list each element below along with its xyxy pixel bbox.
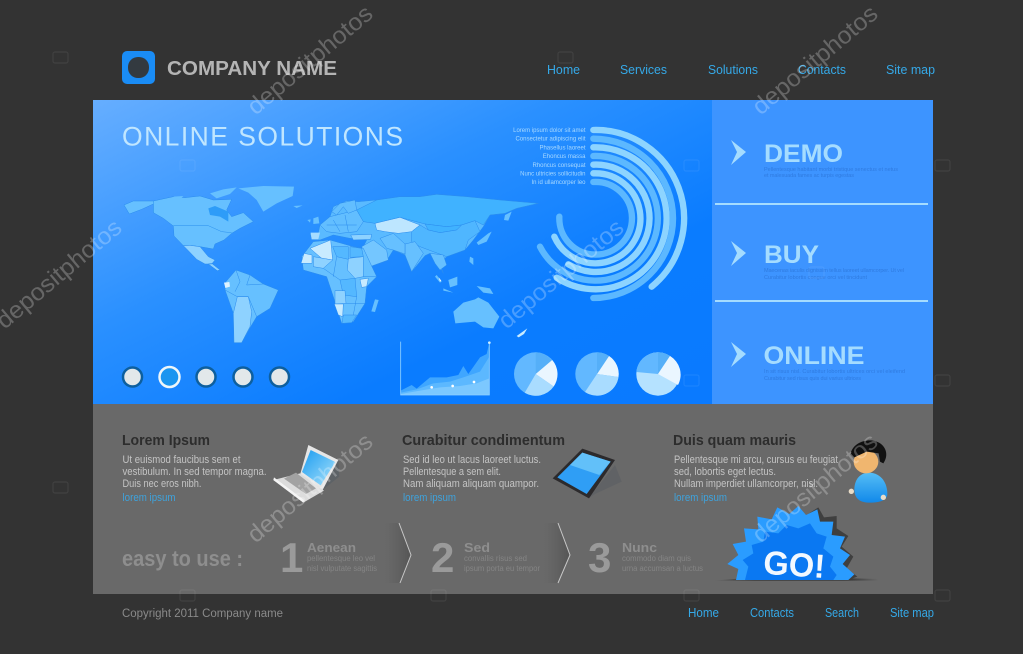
column: lorem ipsum: Ut euismod faucibus sem et (122, 454, 240, 466)
canadian arctic islands (173, 187, 303, 208)
ring chart labels: Phasellus laoreet (539, 145, 586, 151)
greenland (238, 186, 294, 212)
online item: ONLINE (764, 342, 864, 370)
column: curabitur: Pellentesque a sem elit. (403, 466, 501, 478)
footer navigation: Contacts (750, 606, 794, 620)
ring chart labels: Lorem ipsum dolor sit amet (513, 128, 586, 134)
australia (453, 297, 499, 328)
step 3 (588, 534, 703, 581)
online item (731, 342, 905, 382)
pie chart 3 (636, 352, 681, 396)
eurasia (310, 194, 538, 273)
buy item (731, 241, 904, 281)
watermarks (0, 0, 883, 548)
ecuador highlight (224, 282, 230, 288)
column: duis: Nullam imperdiet ullamcorper, nisl. (674, 478, 818, 490)
step 1 (280, 534, 377, 581)
column: lorem ipsum: Lorem Ipsum (122, 432, 210, 449)
buy item: Maecenas iaculis dignissim tellus laoreet ullamcorper. Ut vel (764, 268, 904, 274)
step 1: pellentesque leo vel (307, 554, 375, 563)
mexico and central america (183, 245, 220, 271)
top navigation (547, 63, 935, 77)
south america borders (233, 297, 252, 343)
pie chart 2 (575, 352, 619, 396)
scandinavia (332, 200, 357, 215)
hero title: ONLINE SOLUTIONS (122, 122, 403, 152)
column: lorem ipsum: Duis nec eros nibh. (122, 478, 202, 490)
india (405, 242, 423, 272)
panel: hero (93, 100, 712, 404)
footer navigation (688, 606, 934, 620)
easy to use label: easy to use : (122, 546, 243, 571)
buy item: BUY (764, 241, 819, 269)
step 1: 1 (280, 534, 303, 581)
buy item: Curabitur lobortis congue orci vel tincidunt (764, 275, 867, 281)
column: duis: Duis quam mauris (673, 432, 796, 449)
area chart (401, 341, 491, 395)
column: curabitur: Curabitur condimentum (402, 432, 565, 449)
footer navigation: Search (825, 606, 859, 620)
column: duis: Pellentesque mi arcu, cursus eu feugiat (674, 454, 838, 466)
japan and philippines (469, 212, 512, 265)
online item: Curabitur sed risus quis dui varius ultrices (764, 376, 861, 382)
top navigation: Solutions (708, 63, 758, 77)
step 3: 3 (588, 534, 611, 581)
arrow 2 (544, 523, 570, 583)
pie chart 1 (514, 352, 558, 396)
arabia and middle east (362, 240, 388, 267)
watermarks: depositphotos (242, 0, 378, 120)
step 2: convallis risus sed (464, 554, 527, 563)
kazakhstan (375, 217, 420, 233)
copyright: Copyright 2011 Company name (122, 608, 283, 620)
icon: person (849, 440, 887, 503)
watermarks: depositphotos (747, 428, 883, 548)
step 3: Nunc (622, 540, 657, 555)
go burst (713, 506, 878, 586)
top navigation: Home (547, 63, 580, 77)
column: curabitur (402, 432, 565, 504)
central africa (340, 278, 357, 297)
column: lorem ipsum (122, 432, 266, 504)
europe borders (320, 210, 363, 233)
north america (124, 196, 253, 249)
indonesia (435, 275, 493, 294)
russia (357, 194, 538, 227)
column: lorem ipsum: vestibulum. In sed tempor magna. (122, 466, 266, 478)
watermarks: depositphotos (493, 214, 629, 334)
footer navigation: Site map (890, 606, 934, 620)
ring chart labels: Rhoncus consequat (532, 163, 586, 169)
online item: In sit risus nisl. Curabitur lobortis ultrices orci vel eleifend (764, 369, 905, 375)
demo item: et malesuada fames ac turpis egestas (764, 173, 854, 179)
step 2 (431, 534, 540, 581)
step 2: ipsum porta eu tempor (464, 564, 540, 573)
sudan chad egypt (347, 257, 363, 278)
turkey (351, 234, 372, 240)
africa (302, 240, 377, 323)
column: lorem ipsum: lorem ipsum (122, 492, 176, 504)
step 3: urna accumsan a luctus (622, 564, 703, 573)
watermarks: depositphotos (242, 428, 378, 548)
china (412, 221, 480, 257)
step 3: commodo diam quis (622, 554, 691, 563)
arrow 1 (385, 523, 411, 583)
column: curabitur: Nam aliquam aliquam quampor. (403, 478, 539, 490)
company name: COMPANY NAME (167, 58, 337, 80)
world map (124, 186, 538, 343)
step 2: Sed (464, 540, 490, 555)
go burst: GO! (762, 545, 826, 586)
madagascar (371, 299, 379, 312)
step 1: Aenean (307, 540, 356, 555)
south america (225, 270, 278, 343)
hudson bay (208, 206, 228, 222)
ring chart labels: In id ullamcorper leo (531, 180, 586, 186)
slider dots (123, 367, 289, 387)
panel: lower grey (93, 404, 933, 594)
watermark camera marks (53, 52, 950, 601)
algeria and mauritania (301, 240, 333, 263)
britain (307, 217, 319, 224)
ring chart labels (513, 128, 586, 186)
demo item: DEMO (764, 140, 843, 168)
top navigation: Services (620, 63, 667, 77)
ring chart labels: Consectetur adipiscing elit (515, 137, 586, 143)
new zealand (517, 328, 527, 337)
step 2: 2 (431, 534, 454, 581)
logo icon (122, 51, 155, 84)
icon: tablet (553, 449, 622, 498)
step 1: nisl vulputate sagittis (307, 564, 377, 573)
column: duis (673, 432, 838, 504)
demo item (731, 140, 898, 179)
mongolia (425, 224, 462, 233)
southeast asia (430, 253, 447, 270)
canada border (153, 201, 232, 233)
panel: sidebar (712, 100, 933, 404)
top navigation: Site map (886, 63, 935, 77)
iberia (311, 233, 320, 239)
ring chart labels: Ehoncus massa (543, 154, 586, 160)
footer navigation: Home (688, 606, 719, 620)
watermarks: depositphotos (747, 0, 883, 120)
ring chart labels: Nunc ultricies sollicitudin (520, 172, 586, 178)
icon: laptop (273, 445, 339, 503)
column: duis: sed, lobortis eget lectus. (674, 466, 776, 478)
column: curabitur: lorem ipsum (403, 492, 456, 504)
ring chart (540, 130, 684, 298)
column: curabitur: Sed id leo ut lacus laoreet luctus. (403, 454, 541, 466)
column: duis: lorem ipsum (674, 492, 727, 504)
top navigation: Contacts (798, 63, 846, 77)
demo item: Pellentesque habitant morbi tristique senectus et netus (764, 167, 898, 173)
